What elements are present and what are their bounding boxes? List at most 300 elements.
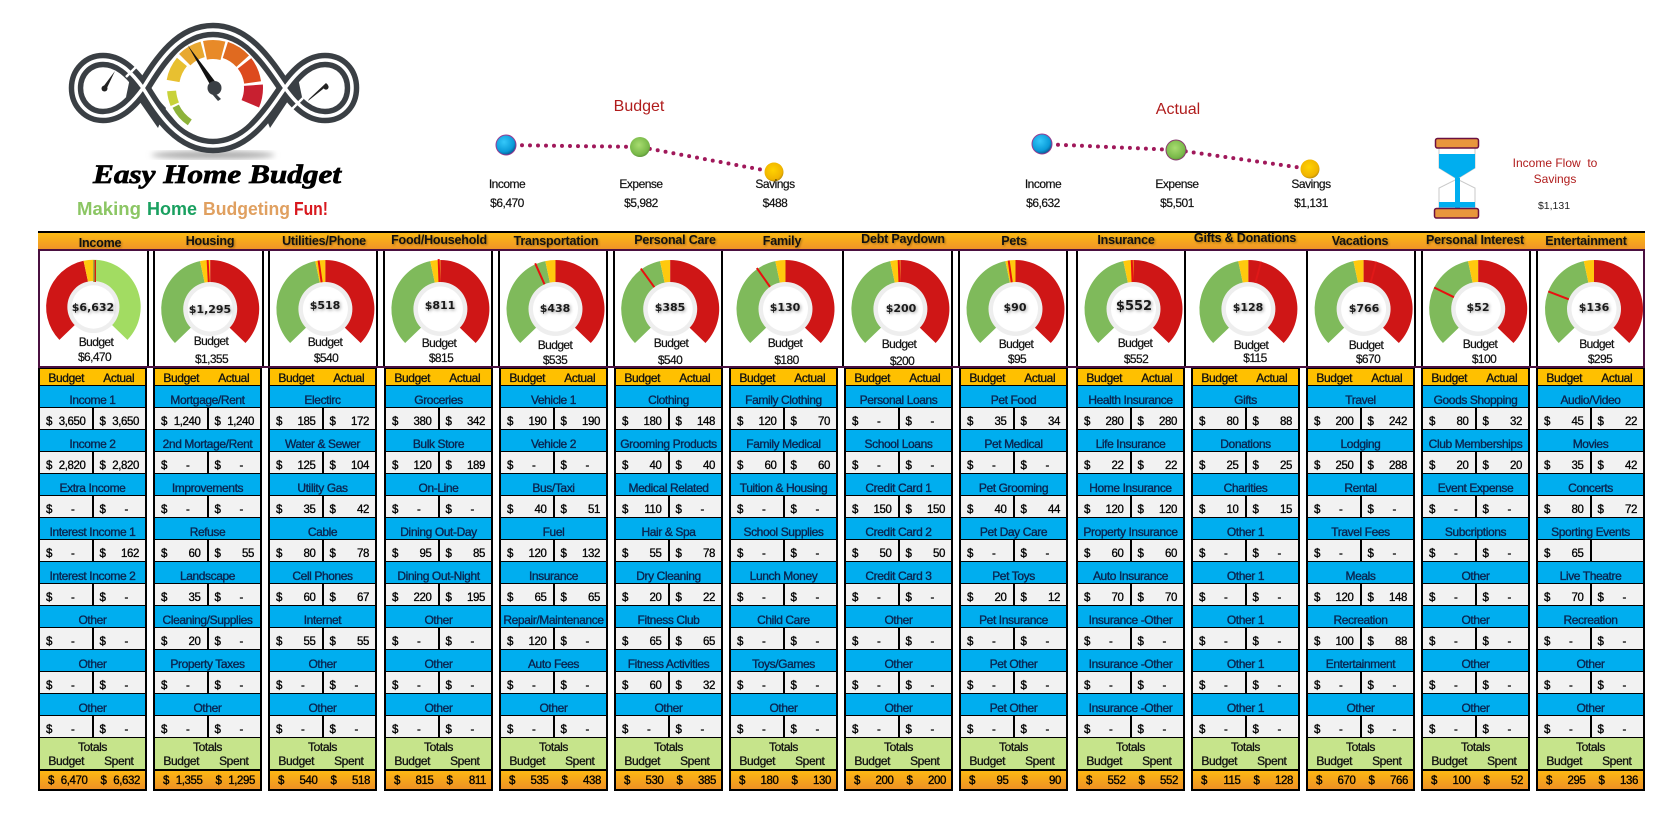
row: Sporting Events: Sporting Events [1551,525,1630,539]
row: Cell Phones: Cell Phones [292,569,353,583]
row: Live Theatre: $ 70 [1544,592,1584,604]
row: Groceries: Groceries [414,393,463,407]
totals values [616,771,721,789]
row: Cleaning/Supplies: $ - [214,636,243,648]
row: Mortgage/Rent: $ 1,240 [161,416,200,428]
totals values: $ 530 [624,775,664,787]
row: Property Taxes [155,650,260,693]
budget/actual header: Actual [1486,371,1517,385]
budget/actual header: Actual [1371,371,1402,385]
totals values: $ 6,632 [100,775,140,787]
row: Concerts: $ 72 [1598,504,1637,516]
row: Other: $ - [1429,636,1458,648]
budget labels and values: $488 [763,196,788,210]
totals values [846,771,951,789]
row: Insurance -Other: Insurance -Other [1089,613,1172,627]
totals label: Spent [680,754,709,768]
row: Income 2: Income 2 [69,437,116,451]
row: Donations: $ 25 [1252,460,1292,472]
row: Insurance -Other: $ - [1138,636,1166,648]
row: Fuel: $ 120 [507,548,546,560]
actual labels and values: Income [1025,177,1062,191]
row: Movies: $ 42 [1598,460,1637,472]
row: Insurance: $ 65 [560,592,600,604]
row: Improvements [155,474,260,517]
budget labels and values: Savings [755,177,795,191]
gauge: Personal Care: Budget [654,336,689,350]
row: Fitness Activities: $ 32 [676,680,715,692]
row: Audio/Video: Audio/Video [1560,393,1621,407]
row: Other [1423,650,1528,694]
totals values [1308,771,1413,789]
budget/actual header: Actual [103,371,134,385]
gauge: Vacations: $670 [1356,352,1381,366]
row: Dry Cleaning [616,562,721,606]
row: Other [1423,606,1528,650]
row: Refuse: Refuse [190,525,225,539]
row: Recreation: $ 88 [1368,636,1407,648]
row: Other: Other [654,701,682,715]
gauge: Insurance: $552 [1124,352,1149,366]
row: Goods Shopping [1423,386,1528,430]
totals values: $ 540 [278,775,318,787]
gauge: Personal Care [621,260,719,367]
heading: Debt Paydown: Debt Paydown [861,232,945,246]
row: Other [1423,562,1528,606]
budget/actual header: Actual [909,371,940,385]
budget/actual header [40,369,145,385]
totals label: Spent [219,754,248,768]
heading: Income: Income [79,236,122,250]
row: Pet Insurance [961,606,1066,650]
row: Insurance -Other: Insurance -Other [1089,657,1172,671]
totals label: Budget [624,754,660,768]
column headings [79,231,1628,250]
row: Interest Income 2 [40,562,145,605]
gauge: Pets: Budget [999,337,1034,351]
row: Other: $ - [560,724,589,736]
row: Other: $ - [1314,724,1342,736]
row: Child Care: $ - [737,636,766,648]
totals label: Totals [308,740,337,754]
row: Health Insurance: $ 280 [1084,416,1124,428]
gauge: Pets: $95 [1008,352,1027,366]
heading: Personal Care: Personal Care [634,233,716,247]
row: Credit Card 3: $ - [852,592,880,604]
row: Rental: $ - [1368,504,1396,516]
row: Child Care [731,606,836,650]
row: Other: $ - [392,724,420,736]
row: Repair/Maintenance [501,606,606,649]
actual labels and values: Expense [1155,177,1199,191]
budget/actual header: Budget [1546,371,1582,385]
row: Other 1: Other 1 [1227,525,1264,539]
budget/actual header: Budget [739,371,775,385]
budget labels and values: $5,982 [624,196,659,210]
row: Family Medical: $ 60 [790,460,830,472]
totals label [846,738,951,769]
row: Interest Income 1: $ 162 [100,548,139,560]
row: Health Insurance: $ 280 [1138,416,1177,428]
row: Property Insurance: $ 60 [1084,548,1124,560]
row: Dining Out-Night: $ 220 [392,592,432,604]
row: Other: $ - [1368,724,1396,736]
row: Other: $ - [1544,680,1572,692]
totals label [1423,738,1528,769]
totals values: $ 128 [1254,775,1293,787]
row: Other: $ - [1598,680,1626,692]
row: Life Insurance: $ 22 [1084,460,1124,472]
row: School Loans: $ - [906,460,934,472]
row: Medical Related [616,474,721,518]
budget/actual header [1538,369,1643,385]
row: Fitness Activities: $ 60 [622,680,662,692]
row: Pet Toys: Pet Toys [992,569,1035,583]
row: Other 1: Other 1 [1227,613,1264,627]
budget/actual header: Budget [163,371,199,385]
row: Personal Loans: $ - [906,416,934,428]
row: School Supplies [731,518,836,562]
row: Electirc: Electirc [304,393,341,407]
row: Other: $ - [906,724,934,736]
row: Refuse [155,518,260,561]
row: Other: $ - [1544,724,1572,736]
totals label: Budget [1201,754,1237,768]
income flow to savings text: $1,131 [1538,200,1570,212]
gauge: Personal Interest [1429,260,1527,366]
row: On-Line: On-Line [419,481,458,495]
row: Pet Other [961,650,1066,694]
row: School Loans: $ - [852,460,880,472]
budget/actual header: Actual [1256,371,1287,385]
row: Toys/Games: Toys/Games [752,657,815,671]
budget/actual header [846,369,951,385]
row: Credit Card 3 [846,562,951,606]
gauge: Debt Paydown: $200 [890,354,915,368]
budget/actual header: Budget [624,371,660,385]
row: Pet Day Care: $ - [1020,548,1049,560]
row: Other 1: $ - [1252,636,1281,648]
gauge: Income: Budget [79,335,114,349]
row: Toys/Games: $ - [790,680,819,692]
row: Sporting Events [1538,518,1643,562]
gauge: Transportation: $438 [540,302,570,315]
row: Personal Loans: Personal Loans [860,393,937,407]
gauge: Insurance [1084,260,1183,366]
row: Meals: Meals [1345,569,1376,583]
row: Other 1: $ - [1252,548,1281,560]
row: Property Taxes: Property Taxes [170,657,245,671]
row: Health Insurance: Health Insurance [1088,393,1173,407]
row: Family Medical [731,430,836,474]
totals label: Spent [565,754,594,768]
row: Pet Day Care [961,518,1066,562]
totals values: $ 95 [969,775,1008,787]
row: Internet: $ 55 [330,636,369,648]
row: Dining Out-Day: $ 95 [392,548,432,560]
row: Family Clothing: $ 70 [790,416,830,428]
row: Auto Insurance: $ 70 [1084,592,1124,604]
row: Lunch Money: $ - [737,592,766,604]
totals values [501,771,606,789]
totals values: $ 180 [739,775,778,787]
row: Insurance -Other: $ - [1138,680,1166,692]
row: Vehicle 1: Vehicle 1 [531,393,576,407]
row: Property Taxes: $ - [214,680,243,692]
logo tagline: Budgeting [203,199,290,219]
row: Dining Out-Night: Dining Out-Night [397,569,480,583]
row: Other 1 [1193,518,1298,562]
table column: Income [38,368,147,791]
row: Hair & Spa: $ 55 [622,548,662,560]
totals values: $ 90 [1022,775,1061,787]
row: Other: $ - [214,724,243,736]
row: Auto Insurance: $ 70 [1138,592,1177,604]
row: Vehicle 1: $ 190 [507,416,546,428]
row: Pet Other: $ - [1020,680,1049,692]
row: Event Expense [1423,474,1528,518]
row: Cell Phones: $ 67 [330,592,369,604]
row: 2nd Mortage/Rent: $ - [161,460,190,472]
logo wordmark: Easy Home Budget [92,160,342,189]
row: Bus/Taxi: Bus/Taxi [532,481,575,495]
gauge: Gifts & Donations: $128 [1233,301,1263,314]
totals values: $ 1,295 [216,775,255,787]
row: Other: $ - [330,724,358,736]
row: Other [1538,650,1643,694]
gauge panel frame [39,250,1644,367]
row: Repair/Maintenance: Repair/Maintenance [503,613,604,627]
row: Other [386,606,491,649]
totals label: Spent [1142,754,1171,768]
row: Auto Insurance [1078,562,1183,606]
row: Credit Card 2 [846,518,951,562]
gauge: Housing: Budget [194,334,229,348]
totals values: $ 815 [394,775,434,787]
row: Property Insurance [1078,518,1183,562]
gauge: Income: $6,470 [78,350,112,364]
row: Entertainment: Entertainment [1326,657,1395,671]
totals label: Budget [509,754,545,768]
heading: Food/Household: Food/Household [391,233,487,247]
actual labels and values: Savings [1291,177,1331,191]
row: Credit Card 3: $ - [906,592,934,604]
row: Interest Income 2: $ - [100,592,128,604]
totals values: $ 1,355 [163,775,202,787]
row: Travel Fees: $ - [1368,548,1396,560]
table column: Pets [959,368,1068,791]
income flow to savings text [1513,156,1598,212]
row: Rental: $ - [1314,504,1342,516]
row: Auto Insurance: Auto Insurance [1093,569,1168,583]
gauge: Utilities/Phone [276,260,374,365]
logo emblem: infinity speedometer [76,30,352,159]
row: Other 1: $ - [1199,636,1228,648]
actual flow chart [1025,101,1331,210]
row: Home Insurance: Home Insurance [1089,481,1172,495]
row: Fitness Club [616,606,721,650]
row: Health Insurance [1078,386,1183,430]
row: Travel: $ 200 [1314,416,1354,428]
row: Pet Other: $ - [1020,724,1049,736]
row: Interest Income 1: $ - [46,548,74,560]
row: Event Expense: Event Expense [1438,481,1513,495]
row: Other: Other [193,701,222,715]
row: Other: $ - [330,680,358,692]
row: Toys/Games: $ - [737,680,766,692]
gauge: Utilities/Phone: $540 [314,351,339,365]
row: Pet Grooming: $ 40 [967,504,1006,516]
row: Travel: $ 242 [1368,416,1407,428]
budget/actual header [731,369,836,385]
row: Other [1423,694,1528,738]
row: Movies: Movies [1573,437,1608,451]
totals values: $ 518 [330,775,370,787]
row: Electirc: $ 172 [330,416,369,428]
gauge: Insurance: $552 [1116,299,1152,314]
actual income ball [1032,134,1052,154]
row: Other: Other [1461,569,1490,583]
row: Home Insurance: $ 120 [1084,504,1124,516]
row: Donations: Donations [1220,437,1271,451]
row: Other: $ - [1598,724,1626,736]
row: Pet Other [961,694,1066,738]
row: Insurance [501,562,606,605]
row: Auto Fees: $ - [507,680,536,692]
row: Other: $ - [676,724,704,736]
totals label: Spent [795,754,824,768]
row: Fuel: $ 132 [560,548,600,560]
row: Refuse: $ 55 [214,548,254,560]
row: Credit Card 1: $ 150 [906,504,945,516]
budget/actual header [1308,369,1413,385]
row: Other [1538,694,1643,738]
row: Club Memberships [1423,430,1528,474]
row: Donations [1193,430,1298,474]
heading: Transportation: Transportation [514,234,598,248]
row: Grooming Products: $ 40 [676,460,715,472]
row: Club Memberships: Club Memberships [1429,437,1522,451]
row: Repair/Maintenance: $ - [560,636,589,648]
totals values: $ 670 [1316,775,1356,787]
gauge: Vacations [1315,260,1413,366]
row: Groceries [386,386,491,429]
budget/actual header: Budget [278,371,314,385]
row: Other: $ - [392,680,420,692]
totals label: Budget [739,754,775,768]
row: Insurance -Other [1078,606,1183,650]
totals values: $ 200 [906,775,946,787]
row: Other: $ - [446,636,474,648]
row: Insurance -Other: $ - [1084,724,1112,736]
row: Home Insurance [1078,474,1183,518]
budget title: Budget [614,98,665,115]
row: Grooming Products: $ 40 [622,460,662,472]
row: Other [1308,694,1413,738]
budget/actual header [386,369,491,385]
row: Income 1 [40,386,145,429]
row: Recreation [1308,606,1413,650]
budget/actual header: Actual [333,371,364,385]
row: Other: $ - [1482,636,1511,648]
table column: Personal Interest [1421,368,1530,791]
row: Other: Other [424,613,452,627]
row: Pet Toys: $ 12 [1020,592,1060,604]
row: Other: $ - [46,724,74,736]
row: Credit Card 1: $ 150 [852,504,892,516]
totals label: Spent [1602,754,1631,768]
row: Dining Out-Day: Dining Out-Day [400,525,477,539]
row: Internet: $ 55 [276,636,316,648]
row: Bulk Store: $ 189 [446,460,485,472]
row: Insurance -Other: $ - [1084,636,1112,648]
row: School Loans: School Loans [865,437,932,451]
totals values: $ 438 [562,775,601,787]
budget/actual header: Budget [509,371,545,385]
row: Other 1: Other 1 [1227,569,1264,583]
row: Other [270,694,375,737]
gauge: Pets: $90 [1004,301,1027,314]
totals label [386,738,491,769]
row: Cable: $ 78 [330,548,369,560]
row: Movies [1538,430,1643,474]
row: On-Line: $ - [446,504,474,516]
row: Credit Card 2: $ 50 [852,548,892,560]
totals values: $ 552 [1086,775,1126,787]
row: Other: $ - [446,680,474,692]
row: Other: Other [78,613,106,627]
budget/actual header [155,369,260,385]
row: Credit Card 2: Credit Card 2 [865,525,932,539]
row: Concerts: $ 80 [1544,504,1584,516]
row: Clothing: $ 148 [676,416,715,428]
row: Recreation: $ - [1544,636,1572,648]
table column: Food/Household [384,368,493,791]
row: Electirc: $ 185 [276,416,316,428]
row: Pet Day Care: $ - [967,548,996,560]
gauge: Income: $6,632 [72,301,114,314]
row: Tuition & Housing: Tuition & Housing [740,481,827,495]
row: Rental [1308,474,1413,518]
budget/actual header: Budget [854,371,890,385]
row: Lodging: $ 250 [1314,460,1354,472]
row: Other 1 [1193,694,1298,738]
row: Other: $ - [100,724,128,736]
row: Landscape: $ - [214,592,243,604]
totals label: Budget [278,754,314,768]
gauge: Personal Interest: $100 [1472,352,1497,366]
row: Insurance -Other: $ - [1138,724,1166,736]
row: Other: $ - [852,636,880,648]
row: Mortgage/Rent: $ 1,240 [214,416,254,428]
row: Clothing: Clothing [648,393,689,407]
budget/actual header: Budget [48,371,84,385]
row: On-Line [386,474,491,517]
gauge: Housing: $1,355 [195,352,229,366]
row: Utility Gas [270,474,375,517]
row: Life Insurance: Life Insurance [1096,437,1165,451]
budget labels and values: Income [489,177,526,191]
row: Other: $ - [622,724,650,736]
logo tagline: Fun! [294,199,328,219]
row: Vehicle 2: Vehicle 2 [531,437,576,451]
row: Travel Fees [1308,518,1413,562]
gauge: Food/Household [391,259,489,365]
totals label: Budget [854,754,890,768]
row: School Supplies: $ - [790,548,819,560]
row: Other 1 [1193,650,1298,694]
row: Other [40,606,145,649]
